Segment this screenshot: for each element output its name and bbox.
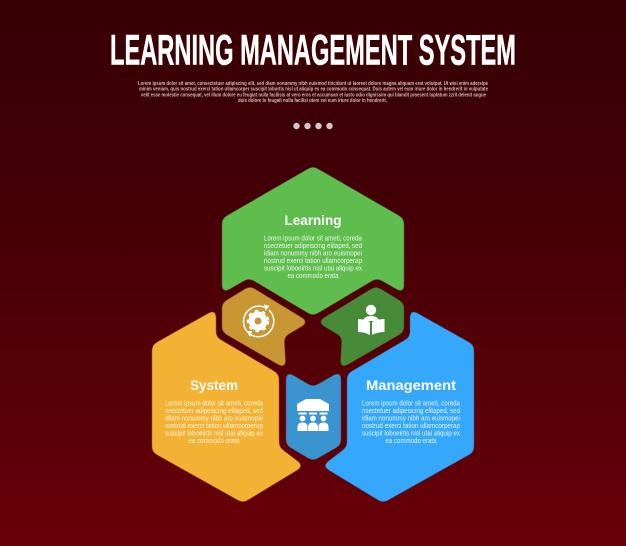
management description: ea commodo erata [386, 438, 437, 445]
learning hexagon [222, 166, 404, 316]
learning description: suscipit loboeirtis nisl utai aliquip ex [264, 266, 362, 272]
system description: Lorem ipsum dolor sit ameti, coreda [165, 400, 263, 408]
pagination dots [293, 123, 333, 129]
learning description: nostrud exerci tation ullamcorperap [264, 258, 362, 265]
system description [165, 400, 263, 445]
management description: nostrud exerci tation ullamcorperap [362, 423, 460, 430]
intro text block: minim veniam, quis nostrud exerci tation ullamcorper suscipit lobortis nisl ut aliquip ex ea commodo consequat. Duis autem vel eum iriure dolor in hendrerit in vulputate [139, 86, 488, 92]
management description: suscipit loboeirtis nisl utai aliquip ex [362, 430, 460, 438]
panel: system [152, 309, 304, 503]
intro text block [138, 81, 488, 104]
system description: idiam nonummy nibh aro euismopei [165, 416, 263, 422]
management description [362, 400, 460, 445]
learning description: Lorem ipsum dolor sit ameti, coreda [264, 236, 362, 242]
icon: person reading book [358, 305, 384, 335]
learning description: nsectetuer adipeiscing elitaped, sed [264, 243, 362, 250]
system description: nsectetuer adipeiscing elitaped, sed [165, 408, 263, 415]
intro text block: Lorem ipsum dolor sit amet, consectetuer adipiscing elit, sed diam nonummy nibh euismod tincidunt ut laoreet dolore magna aliquam erat volutpat. Ut wisi enim adersipe [138, 81, 488, 87]
system description: nostrud exerci tation ullamcorperap [165, 423, 263, 430]
intro text block: velit esse molestie consequat, vel illum dolore eu feugiat nulla facilisis at vero eros et accumsan et iusto odio dignissim qui blandit praesent luptatum zzril delenit augue [141, 92, 486, 98]
panel: learning [222, 166, 404, 316]
system description: suscipit loboeirtis nisl utai aliquip ex [165, 430, 263, 438]
icon: gear with rotating arrows [244, 304, 274, 337]
management description: nsectetuer adipeiscing elitaped, sed [362, 408, 460, 415]
system heading: System [190, 378, 238, 393]
management description: Lorem ipsum dolor sit ameti, coreda [362, 400, 460, 408]
icon: temple with people [297, 399, 329, 431]
intro text block: duis dolore te feugait nulla facilisi utem vel eum iriure dolor in hendrerit. [238, 98, 388, 104]
connector tile: green [317, 286, 404, 369]
system hexagon [152, 309, 304, 503]
learning description [264, 236, 362, 280]
panel: management [322, 309, 474, 503]
system description: ea commodo erata [188, 438, 240, 445]
learning heading: Learning [284, 213, 342, 228]
management heading: Management [366, 378, 457, 393]
learning description: idiam nonummy nibh aro euismopei [264, 250, 362, 258]
learning description: ea commodo erata [288, 273, 339, 280]
connector tile: blue [286, 371, 341, 461]
management description: idiam nonummy nibh aro euismopei [362, 416, 460, 422]
connector tile: orange [222, 286, 309, 369]
management hexagon [322, 309, 474, 503]
